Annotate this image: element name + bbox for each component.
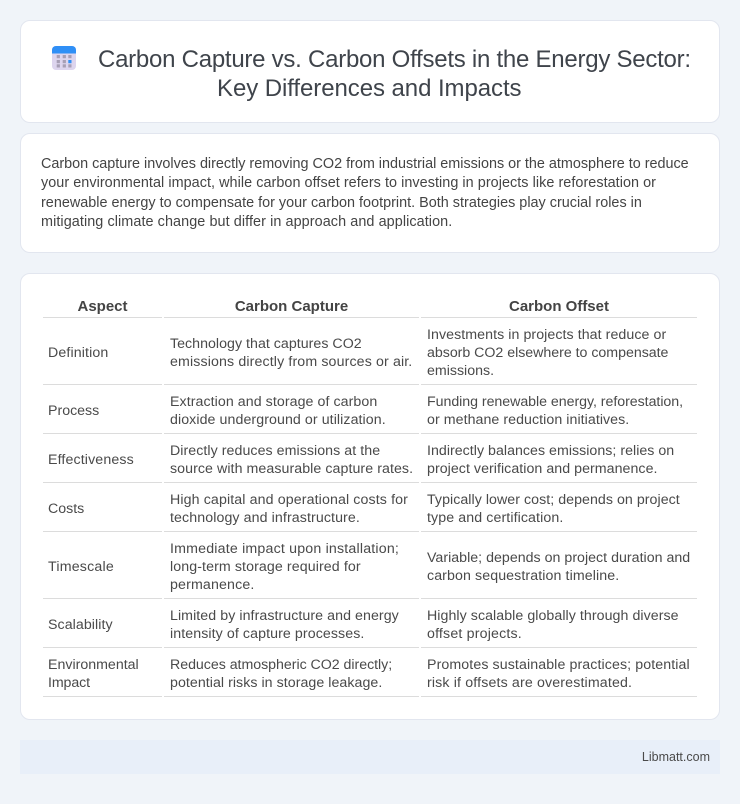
Costs: carbon offset [427,492,680,526]
row: Environmental Impact [48,657,139,691]
Scalability: carbon offset: Highly scalable globally through diverse [427,608,679,624]
title: Carbon Capture vs. Carbon Offsets in the Energy Sector: [98,46,691,73]
Effectiveness: carbon capture: Directly reduces emissions at the [170,443,380,459]
Process: carbon offset: or methane reduction initiatives. [427,412,629,428]
icon: calendar grid [52,46,76,70]
Environmental Impact: carbon capture: potential risks in storage leakage. [170,675,382,691]
row: Costs: Costs [48,501,84,517]
row: Effectiveness: Effectiveness [48,452,134,468]
row: Timescale: Timescale [48,559,114,575]
Timescale: carbon offset: carbon sequestration timeline. [427,568,619,584]
table header: Carbon Capture: Carbon Capture [235,298,348,315]
table header: Aspect: Aspect [77,298,128,315]
Costs: carbon offset: Typically lower cost; depends on project [427,492,680,508]
Scalability: carbon capture [170,608,399,642]
Definition: carbon offset [427,327,668,379]
Scalability: carbon capture: Limited by infrastructure and energy [170,608,399,624]
Definition: carbon capture: Technology that captures CO2 [170,336,362,352]
Definition: carbon capture [170,336,412,370]
Timescale: carbon offset: Variable; depends on project duration and [427,550,690,566]
Costs: carbon offset: type and certification. [427,510,563,526]
Definition: carbon capture: emissions directly from sources or air. [170,354,412,370]
Timescale: carbon capture: permanence. [170,577,254,593]
Scalability: carbon offset: offset projects. [427,626,522,642]
intro text: renewable energy to compensate for your carbon footprint. Both strategies play crucial roles in [41,195,642,211]
table header: Carbon Offset: Carbon Offset [509,298,609,315]
Definition: carbon offset: emissions. [427,363,494,379]
Timescale: carbon capture: Immediate impact upon installation; [170,541,399,557]
Timescale: carbon capture: long-term storage required for [170,559,361,575]
footer bar [20,740,720,774]
intro text: Carbon capture involves directly removing CO2 from industrial emissions or the atmosphere to reduce [41,156,689,172]
row: Environmental Impact: Environmental [48,657,139,673]
Effectiveness: carbon offset: project verification and permanence. [427,461,658,477]
Process: carbon offset [427,394,683,428]
Scalability: carbon offset [427,608,679,642]
intro text: mitigating climate change but differ in approach and application. [41,214,452,230]
Costs: carbon capture [170,492,408,526]
Definition: carbon offset: absorb CO2 elsewhere to compensate [427,345,668,361]
Effectiveness: carbon capture: source with measurable capture rates. [170,461,413,477]
table panel [20,273,720,720]
Environmental Impact: carbon offset: Promotes sustainable practices; potential [427,657,690,673]
Process: carbon capture: Extraction and storage of carbon [170,394,377,410]
title: Key Differences and Impacts [217,75,522,102]
Timescale: carbon offset [427,550,690,584]
Environmental Impact: carbon capture [170,657,392,691]
Effectiveness: carbon offset [427,443,674,477]
intro text [41,156,689,230]
row: Environmental Impact: Impact [48,675,90,691]
Effectiveness: carbon offset: Indirectly balances emissions; relies on [427,443,674,459]
footer credit: Libmatt.com [642,750,710,764]
Process: carbon capture [170,394,386,428]
Costs: carbon capture: technology and infrastructure. [170,510,360,526]
row: Definition: Definition [48,345,108,361]
Scalability: carbon capture: intensity of capture processes. [170,626,364,642]
Environmental Impact: carbon offset [427,657,690,691]
Effectiveness: carbon capture [170,443,413,477]
Process: carbon offset: Funding renewable energy, reforestation, [427,394,683,410]
intro text: your environmental impact, while carbon offset refers to investing in projects like reforestation or [41,175,656,191]
Definition: carbon offset: Investments in projects that reduce or [427,327,666,343]
comparison table [43,298,697,697]
header panel [20,20,720,123]
intro panel [20,133,720,253]
Costs: carbon capture: High capital and operational costs for [170,492,408,508]
Environmental Impact: carbon offset: risk if offsets are overestimated. [427,675,632,691]
title [98,46,691,102]
row: Scalability: Scalability [48,617,113,633]
Timescale: carbon capture [170,541,399,593]
Process: carbon capture: dioxide underground or utilization. [170,412,386,428]
row: Process: Process [48,403,99,419]
Environmental Impact: carbon capture: Reduces atmospheric CO2 directly; [170,657,392,673]
